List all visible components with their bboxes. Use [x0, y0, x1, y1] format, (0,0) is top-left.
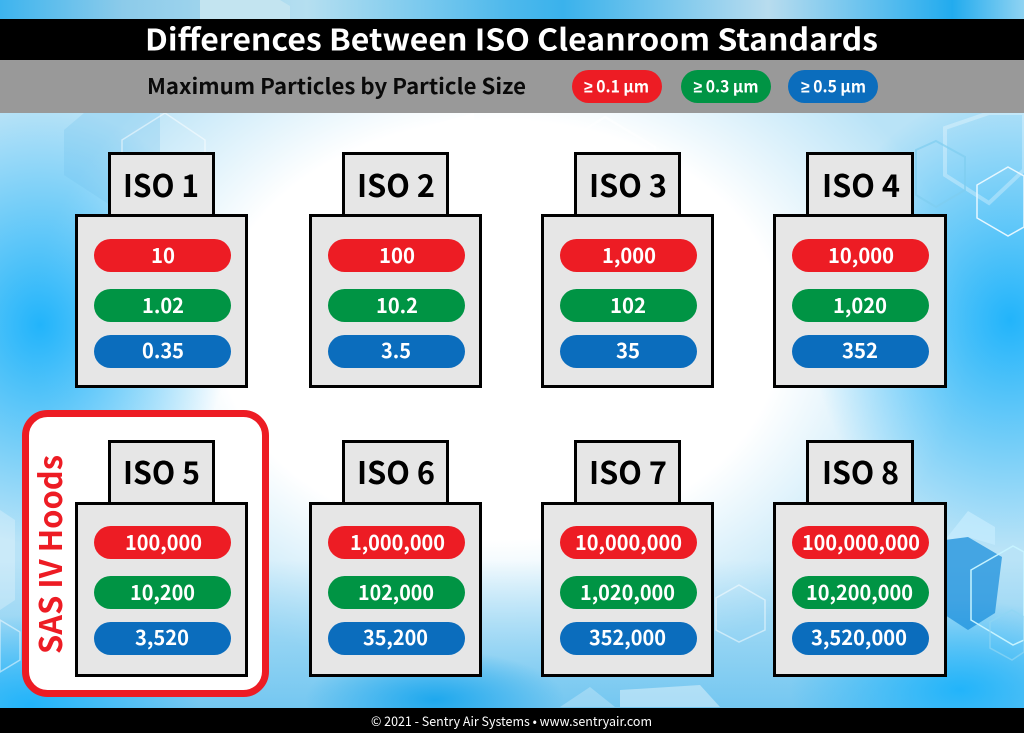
card: ISO 4	[774, 154, 946, 386]
card: ISO 2	[310, 154, 480, 386]
SAS IV Hoods highlight frame	[26, 414, 266, 694]
card: ISO 5: 10,200	[130, 576, 195, 606]
legend: 0.1 micron	[572, 70, 662, 103]
card: ISO 8: 3,520,000	[811, 621, 907, 651]
footer	[0, 708, 1024, 733]
card: ISO 7: ISO 7	[589, 448, 667, 493]
card: ISO 6: ISO 6	[357, 448, 435, 493]
card: ISO 3: 1,000	[602, 239, 656, 269]
subtitle: Maximum Particles by Particle Size	[147, 70, 526, 101]
card: ISO 5: ISO 5	[123, 448, 200, 493]
legend: 0.5 micron	[788, 70, 878, 103]
card: ISO 2: 3.5	[381, 334, 411, 364]
card: ISO 8: ISO 8	[822, 448, 899, 493]
card: ISO 4: 1,020	[833, 289, 887, 319]
card: ISO 2: ISO 2	[357, 161, 435, 206]
footer: © 2021 - Sentry Air Systems • www.sentryair.com	[371, 711, 652, 730]
card: ISO 6: 102,000	[358, 576, 434, 606]
card: ISO 3	[542, 154, 712, 386]
card: ISO 4: ISO 4	[822, 161, 900, 206]
title bar	[0, 16, 1024, 60]
legend: 0.3 micron: ≥ 0.3 µm	[694, 72, 758, 98]
title bar: Differences Between ISO Cleanroom Standards	[145, 16, 878, 60]
card: ISO 4: 10,000	[828, 239, 894, 269]
card: ISO 7: 352,000	[589, 621, 666, 651]
card: ISO 3: 35	[616, 334, 640, 364]
card: ISO 3: ISO 3	[589, 161, 667, 206]
card: ISO 5	[76, 442, 246, 676]
card: ISO 5: 3,520	[135, 621, 189, 651]
card: ISO 6	[310, 442, 480, 676]
card: ISO 8	[774, 442, 946, 676]
legend: 0.3 micron	[681, 70, 771, 103]
card: ISO 6: 35,200	[363, 621, 428, 651]
card: ISO 1: 0.35	[142, 334, 184, 364]
card: ISO 7: 10,000,000	[575, 526, 682, 556]
card: ISO 2: 100	[379, 239, 415, 269]
card: ISO 5: 100,000	[125, 526, 202, 556]
legend: 0.5 micron: ≥ 0.5 µm	[801, 72, 866, 98]
card: ISO 7	[542, 442, 712, 676]
card: ISO 6: 1,000,000	[350, 526, 445, 556]
legend: 0.1 micron: ≥ 0.1 µm	[584, 72, 649, 98]
card: ISO 1: ISO 1	[123, 161, 199, 206]
card: ISO 8: 100,000,000	[802, 526, 920, 556]
card: ISO 2: 10.2	[376, 289, 418, 319]
card: ISO 1: 10	[151, 239, 175, 269]
card: ISO 4: 352	[842, 334, 878, 364]
card: ISO 1	[76, 154, 246, 386]
card: ISO 7: 1,020,000	[580, 576, 675, 606]
SAS IV Hoods highlight frame: SAS IV Hoods	[26, 455, 71, 654]
card: ISO 3: 102	[610, 289, 646, 319]
legend bar	[0, 60, 1024, 113]
card: ISO 1: 1.02	[142, 289, 184, 319]
card: ISO 8: 10,200,000	[806, 576, 913, 606]
